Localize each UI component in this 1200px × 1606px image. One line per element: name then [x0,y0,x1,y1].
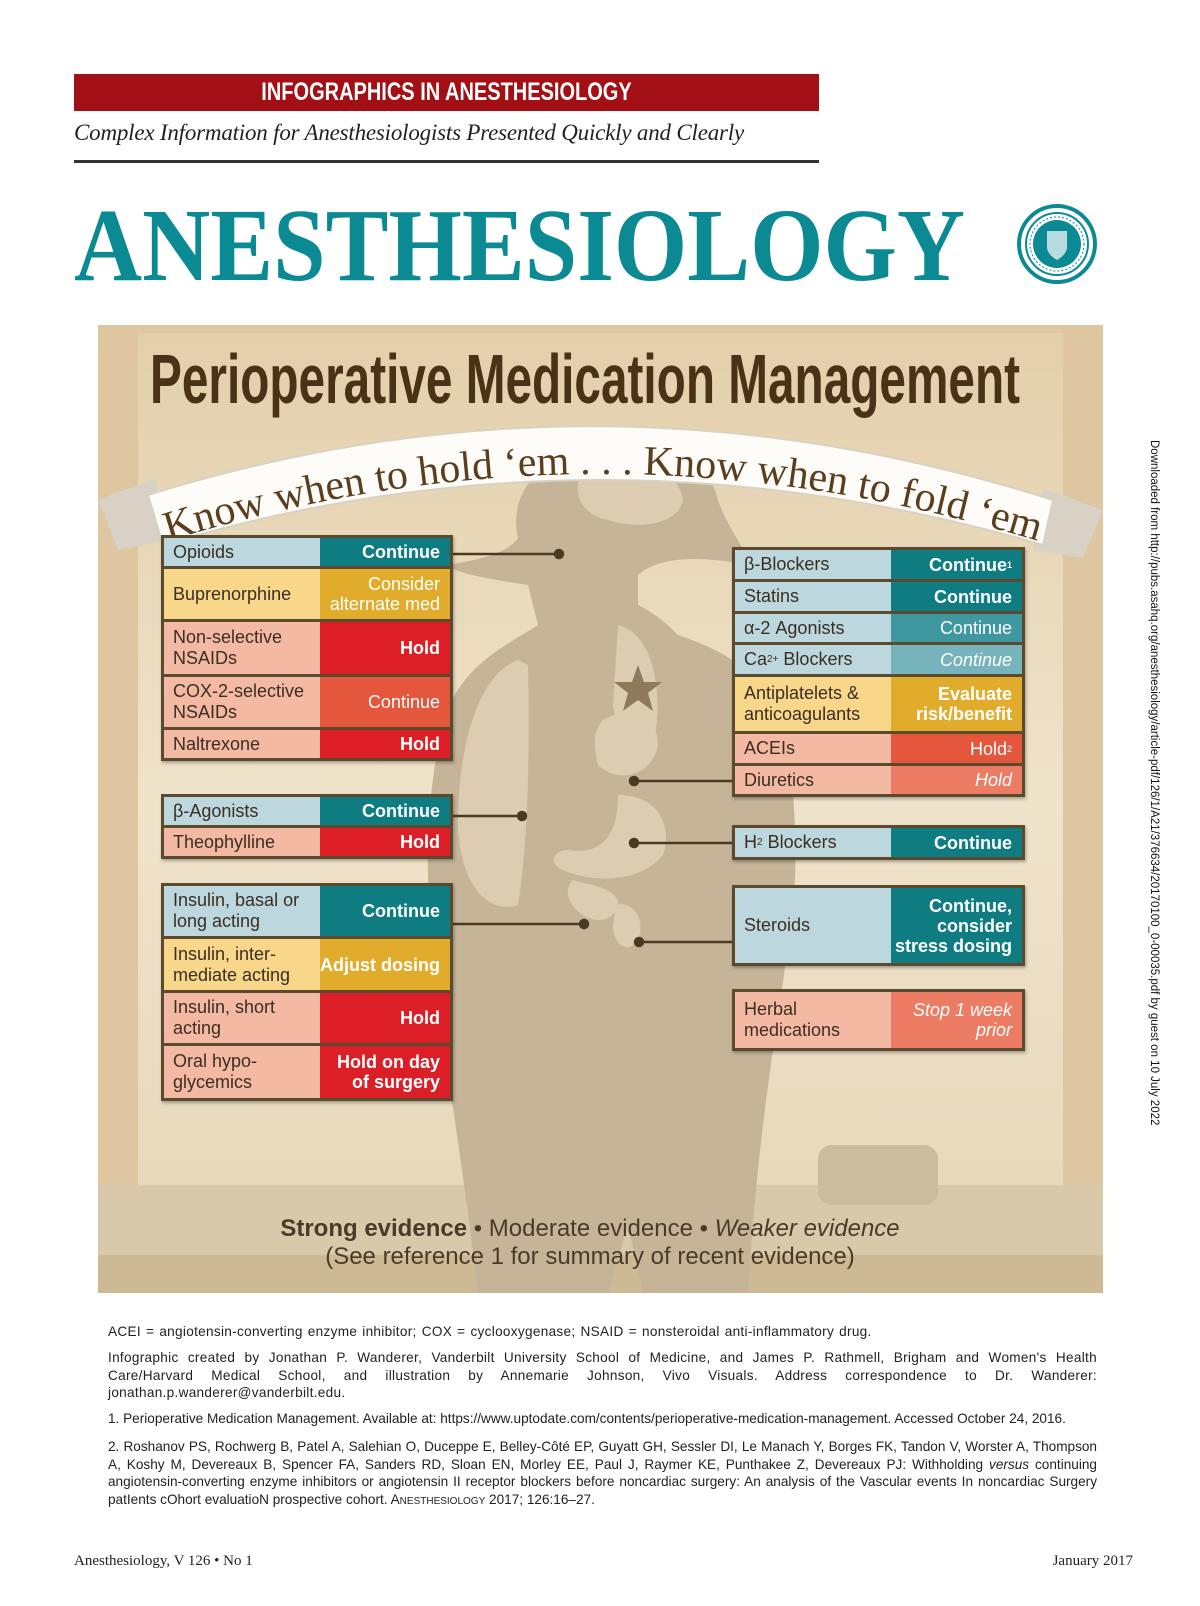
footnote: abbreviations: ACEI = angiotensin-converting enzyme inhibitor; COX = cyclooxygenase; NSAID = nonsteroidal anti-inflammatory drug. [108,1324,872,1339]
table: pulmonary medications: Hold [400,832,440,852]
table: cardiovascular medications: Diuretics [744,770,814,790]
vertical download stamp: Downloaded from http://pubs.asahq.org/anesthesiology/article-pdf/126/1/A21/376634/20170100_0-00035.pdf by guest on 10 July 2022 [1148,440,1160,1125]
table: diabetes medications [161,883,453,1101]
table: H2 blockers: H Blockers [744,832,837,852]
icon: sheriff star [614,665,662,711]
table: H2 blockers: 2 [757,837,763,848]
table: cardiovascular medications: ACEIs [744,738,795,758]
legend: evidence strength: Strong evidence • Moderate evidence • Weaker evidence [280,1215,900,1242]
table: pain medications: Buprenorphine [173,584,291,604]
table: cardiovascular medications: Continue [934,586,1012,606]
table: cardiovascular medications: Hold [970,738,1007,758]
table: diabetes medications: Continue [362,901,440,921]
table: pain medications: Continue [368,692,440,712]
table: pain medications: Naltrexone [173,734,260,754]
table: pain medications: Non-selective NSAIDs [173,627,282,668]
table: pain medications: COX-2-selective NSAIDs [173,681,304,722]
table: pulmonary medications: β-Agonists [173,800,258,820]
table: pain medications: Hold [400,734,440,754]
panel: infographic [98,325,1103,1293]
table: diabetes medications: Insulin, short acting [173,997,275,1038]
table: diabetes medications: Insulin, inter-mediate acting [173,944,290,984]
table: pain medications: Consider alternate med [330,574,440,614]
table: herbal medications [732,989,1025,1051]
table: diabetes medications: Oral hypo-glycemics [173,1051,257,1092]
table: pulmonary medications: Continue [362,801,440,821]
stool / prop bottom right [818,1145,938,1205]
table: cardiovascular medications: Continue [929,554,1007,574]
silhouette: cowboy figure [428,442,796,1293]
table: cardiovascular medications: Hold [975,770,1012,790]
table: diabetes medications: Hold on day of surgery [337,1052,440,1092]
table: cardiovascular medications: Continue [940,650,1012,670]
credits: Infographic created by Jonathan P. Wanderer, Vanderbilt University School of Medicine, and James P. Rathmell, Brigham and Women's Health Care/Harvard Medical School, and illustration by Annemarie Johnson, Vivo Visuals. Address correspondence to Dr. Wanderer: jonathan.p.wanderer@vanderbilt.edu. [108,1350,1097,1400]
table: cardiovascular medications: 2+ [767,654,778,665]
table: steroids: Continue, consider stress dosing [895,896,1012,956]
table: diabetes medications: Hold [400,1008,440,1028]
table: pain medications [161,535,453,761]
legend: evidence strength: (See reference 1 for summary of recent evidence) [325,1243,855,1270]
reference 1: 1. Perioperative Medication Management. Available at: https://www.uptodate.com/contents/perioperative-medication-management. Accessed October 24, 2016. [108,1411,1066,1426]
table: cardiovascular medications: 1 [1007,560,1012,570]
table: cardiovascular medications: Continue [940,618,1012,638]
header banner: Infographics in Anesthesiology: INFOGRAPHICS IN ANESTHESIOLOGY [261,78,632,106]
page footer: date: January 2017 [1053,1553,1133,1569]
icon: society seal [1017,204,1097,284]
table: diabetes medications: Adjust dosing [320,954,440,974]
table: pain medications: Continue [362,542,440,562]
organs: lungs, heart, stomach [458,459,683,947]
table: cardiovascular medications [732,547,1025,797]
table: H2 blockers: Continue [934,832,1012,852]
table: herbal medications: Stop 1 week prior [913,1000,1012,1040]
table: steroids: Steroids [744,915,810,935]
page footer: volume: Anesthesiology, V 126 • No 1 [74,1553,253,1569]
reference 2: 2. Roshanov PS, Rochwerg B, Patel A, Salehian O, Duceppe E, Belley-Côté EP, Guyatt GH, Sessler DI, Le Manach Y, Borges FK, Tandon V, Worster A, Thompson A, Koshy M, Devereaux B, Spencer FA, Sanders RD, Sloan EN, Morley EE, Paul J, Raymer KE, Punthakee Z, Devereaux PJ: Withholding versus continuing angiotensin-converting enzyme inhibitors or angiotensin II receptor blockers before noncardiac surgery: An analysis of the Vascular events In noncardiac Surgery patIents cOhort evaluatioN prospective cohort. ANESTHESIOLOGY 2017; 126:16–27. [108,1439,1097,1506]
table: cardiovascular medications: Statins [744,586,799,606]
header banner: Infographics in Anesthesiology [74,74,819,111]
table: steroids [732,885,1025,966]
rule [74,160,819,163]
table: pulmonary medications [161,794,453,859]
table: pain medications: Opioids [173,542,234,562]
subtitle: Complex Information for Anesthesiologists Presented Quickly and Clearly [74,120,744,145]
table: pain medications: Hold [400,638,440,658]
table: H2 blockers [732,825,1025,860]
table: cardiovascular medications: β-Blockers [744,554,829,574]
table: diabetes medications: Insulin, basal or long acting [173,890,299,931]
table: pulmonary medications: Theophylline [173,832,275,852]
table: cardiovascular medications: Antiplatelets & anticoagulants [744,683,860,724]
table: cardiovascular medications: Evaluate risk/benefit [916,684,1012,724]
table: herbal medications: Herbal medications [744,999,840,1040]
table: cardiovascular medications: 2 [1007,744,1012,754]
legend: evidence strength [280,1215,900,1270]
table: cardiovascular medications: α-2 Agonists [744,618,844,638]
ribbon banner with tagline: Know when to hold ‘em . . . Know when to fold ‘em [161,447,1040,541]
table: cardiovascular medications: Ca Blockers [744,649,852,669]
